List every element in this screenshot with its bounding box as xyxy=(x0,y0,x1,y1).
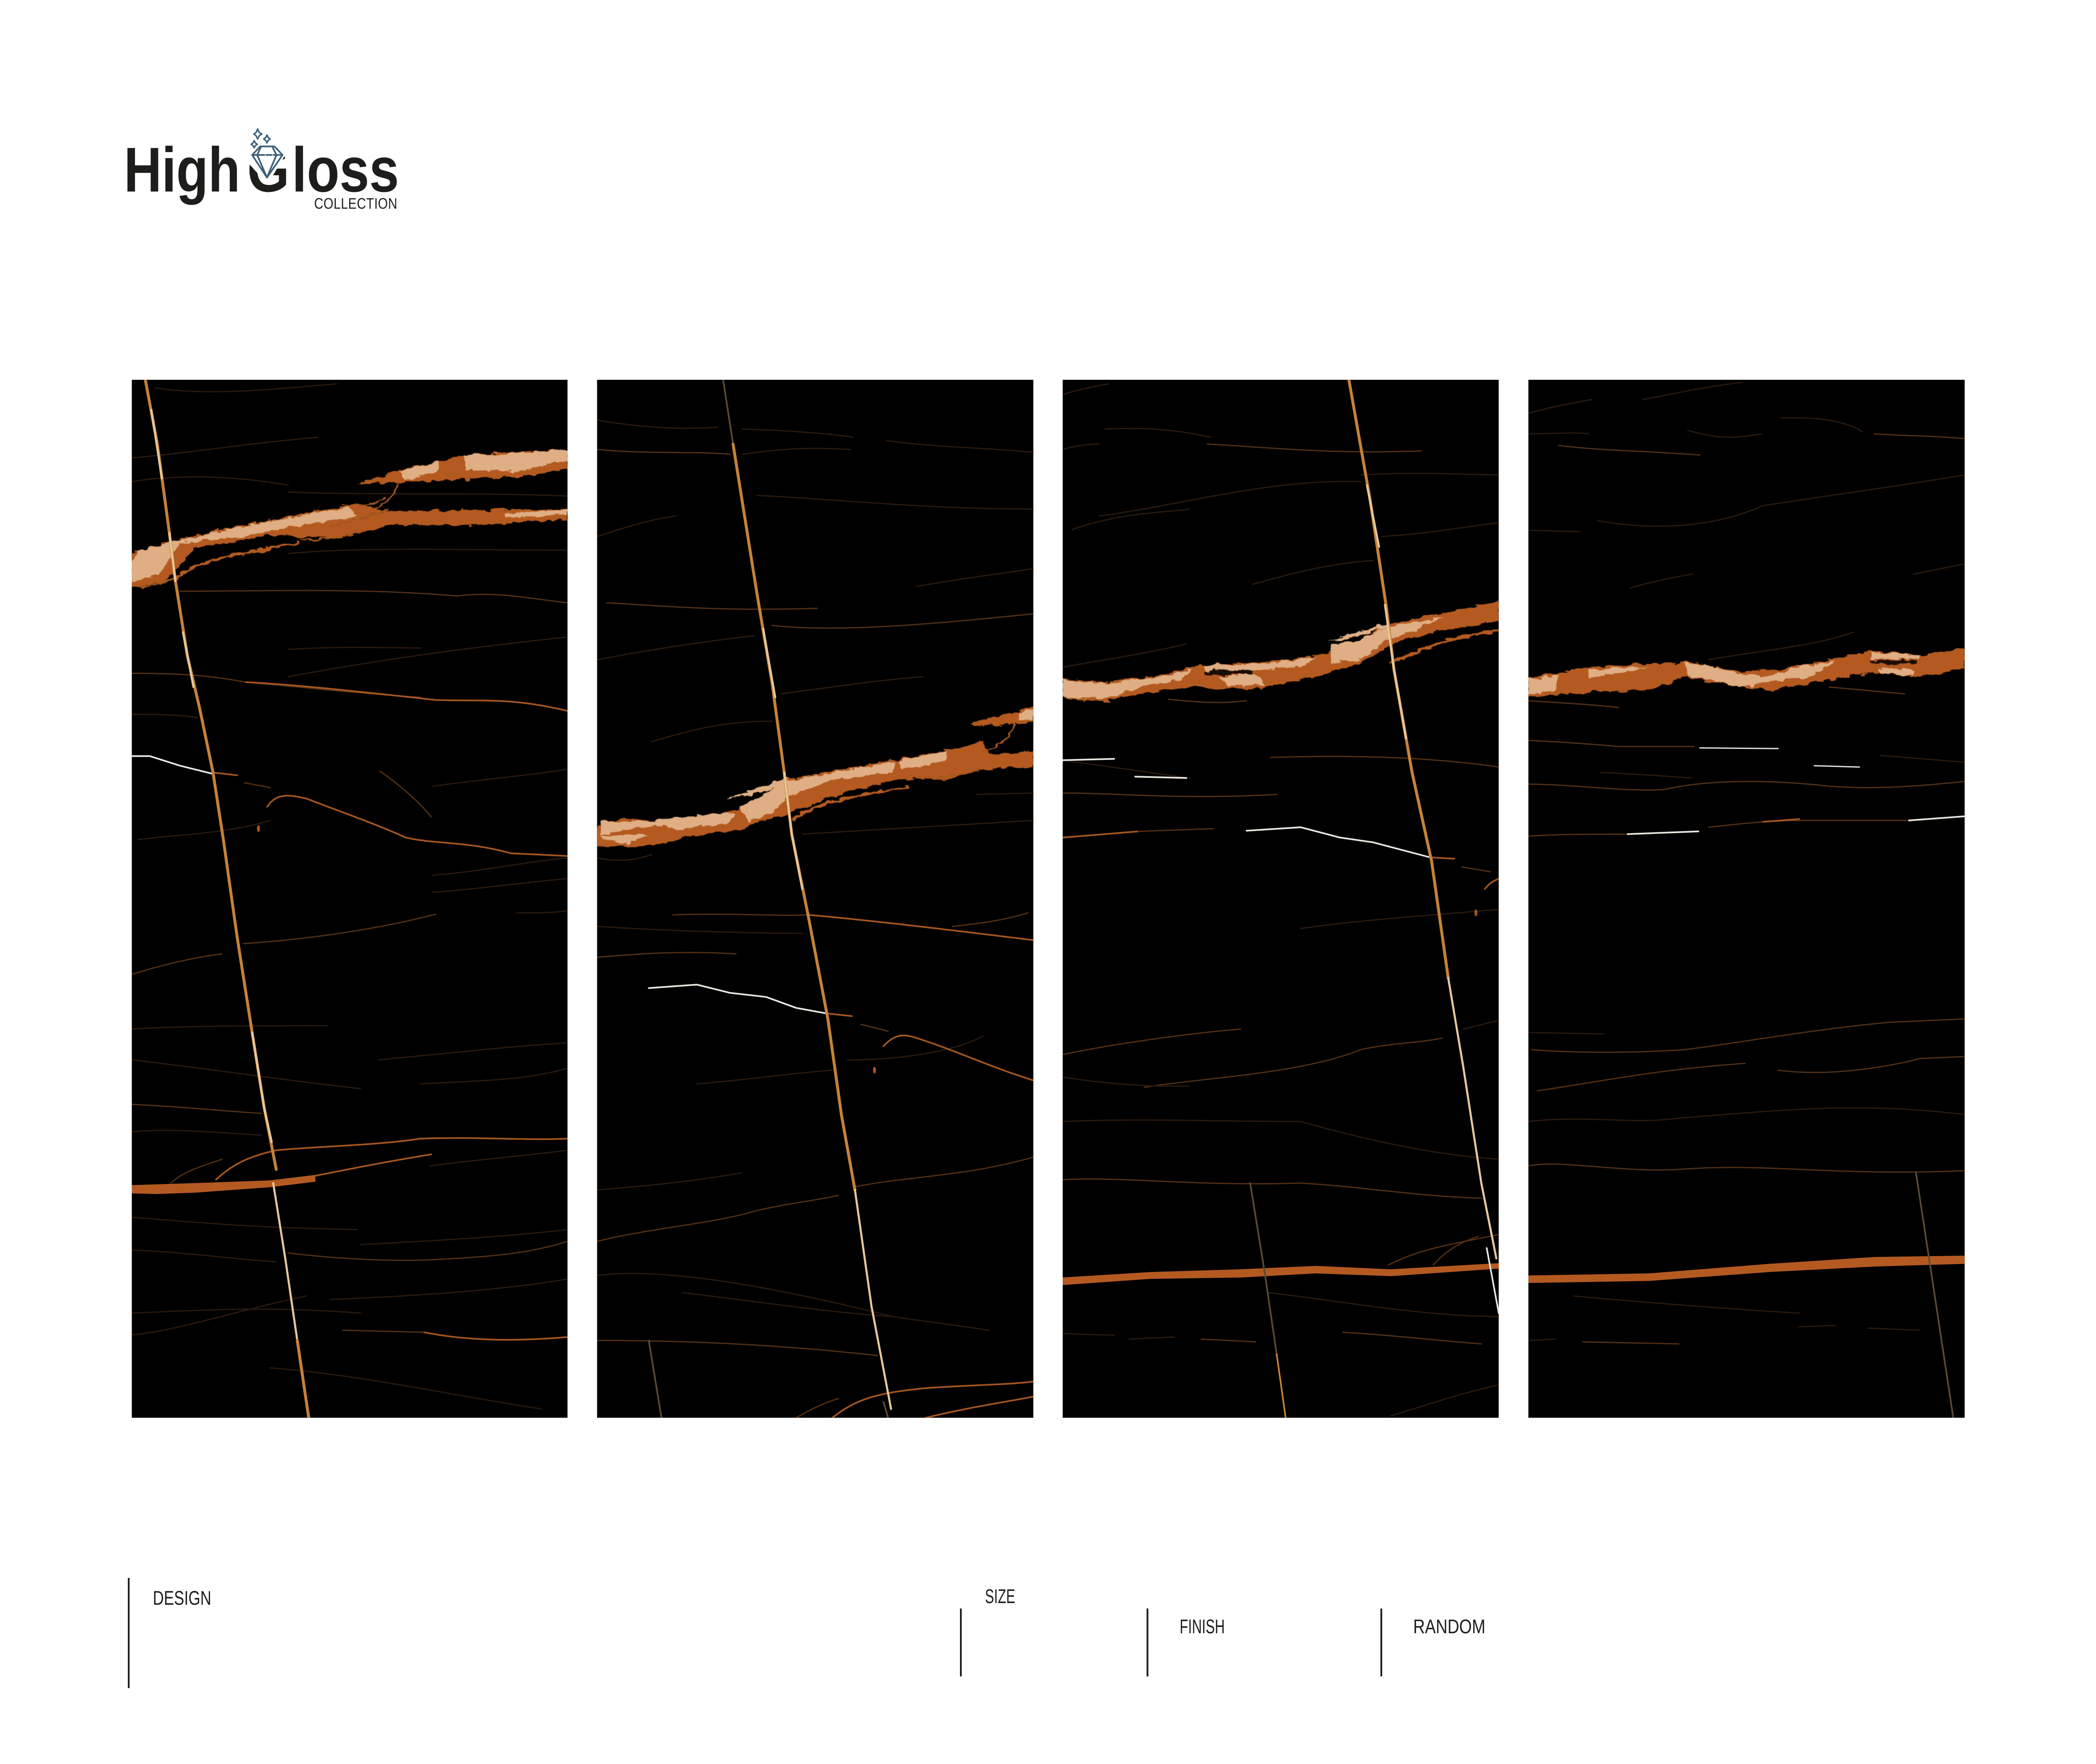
white highlight veins xyxy=(1628,748,1965,834)
footer: design label xyxy=(128,1578,211,1688)
faint veins xyxy=(1063,384,1499,1416)
logo: High Gloss Collection: loss xyxy=(292,135,399,205)
orange thin veins xyxy=(132,673,568,1340)
ribbon veins xyxy=(1528,648,1965,697)
faint veins xyxy=(132,384,568,1409)
panel: marble slab 2 xyxy=(597,380,1033,1418)
logo: High Gloss Collection xyxy=(124,127,399,212)
panel: marble slab 1 xyxy=(132,380,568,1418)
diagonal vein xyxy=(1349,380,1499,1313)
logo: High Gloss Collection: High xyxy=(124,135,240,205)
ribbon veins xyxy=(597,706,1033,847)
icon: diamond with sparkles xyxy=(245,127,285,180)
panel: marble slab 3 xyxy=(1063,380,1499,1418)
bottom vein xyxy=(1063,1263,1499,1285)
orange thin veins xyxy=(1063,759,1499,1265)
diagonal vein xyxy=(723,380,891,1409)
faint veins xyxy=(1528,383,1965,1344)
footer: finish label xyxy=(1147,1609,1225,1676)
footer: random label: RANDOM xyxy=(1413,1616,1485,1638)
logo: High Gloss Collection: COLLECTION xyxy=(314,196,397,212)
ribbon veins xyxy=(1063,601,1499,701)
bottom vein xyxy=(132,1175,315,1194)
bottom vein xyxy=(1528,1256,1965,1283)
footer: random label xyxy=(1380,1609,1485,1676)
secondary diagonal vein xyxy=(1916,1173,1953,1418)
footer: design label: DESIGN xyxy=(153,1588,211,1609)
secondary diagonal vein xyxy=(1250,1183,1286,1418)
footer: size label xyxy=(960,1586,1015,1676)
orange thin veins xyxy=(598,913,1033,1418)
faint veins xyxy=(598,420,1033,1355)
logo: High Gloss Collection: G xyxy=(247,135,290,205)
ribbon veins xyxy=(132,450,568,588)
footer: size label: SIZE xyxy=(985,1586,1015,1608)
diagonal vein xyxy=(145,380,309,1418)
panel: marble slab 4 xyxy=(1528,380,1965,1418)
footer: finish label: FINISH xyxy=(1180,1616,1225,1638)
